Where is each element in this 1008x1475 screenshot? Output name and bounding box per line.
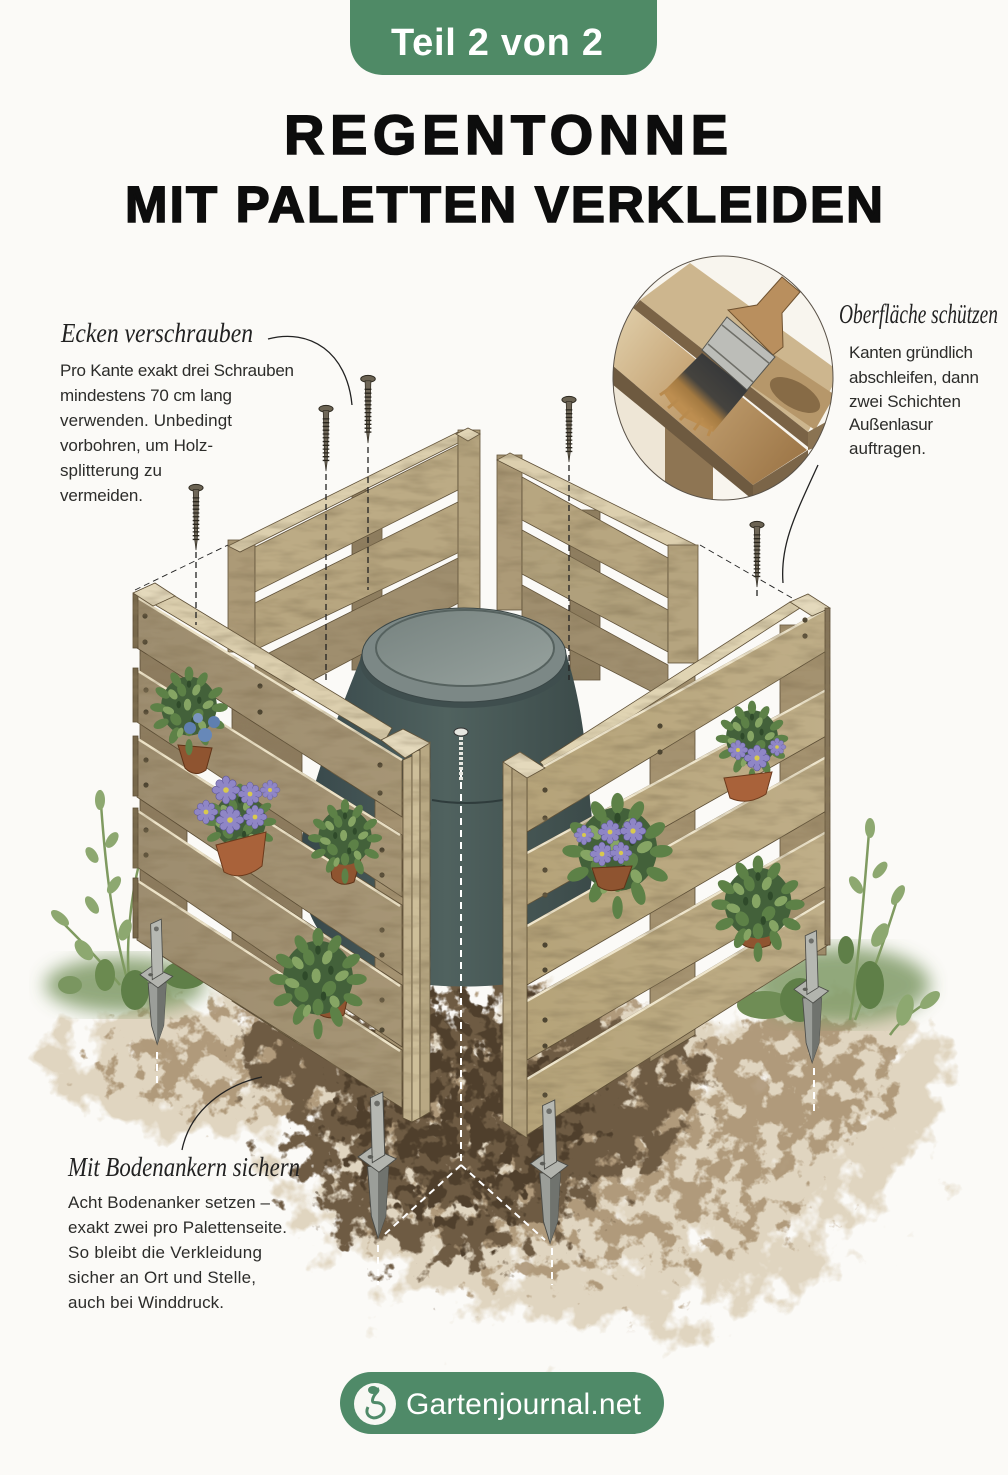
rain barrel [300, 608, 593, 986]
centre screw on barrel [454, 728, 468, 780]
screw 3 [361, 375, 375, 443]
callout text: Kanten gründlich [849, 343, 973, 362]
callout text [68, 1193, 287, 1312]
callout text [60, 361, 294, 505]
corner post [503, 758, 527, 1138]
barrel body [300, 660, 593, 986]
soil ground [0, 930, 990, 1385]
callout text: So bleibt die Verkleidung [68, 1243, 262, 1262]
arrow: surface protection [783, 465, 818, 583]
callout: corners screws [60, 318, 294, 505]
plank highlights [527, 608, 828, 1079]
screw 4 [562, 396, 576, 462]
hanging plant: green lower right [711, 855, 805, 962]
corner caps [503, 752, 545, 778]
planks [137, 598, 402, 1108]
hanging plant: purple flowers left [194, 776, 280, 876]
footer badge [340, 1372, 664, 1434]
callout text: auch bei Winddruck. [68, 1293, 224, 1312]
callout: ground anchors [67, 1152, 300, 1312]
pale outer soil [0, 955, 990, 1385]
screw 5 [750, 521, 764, 587]
callout heading: Mit Bodenankern sichern [67, 1152, 300, 1182]
white guide lines on soil [157, 770, 814, 1285]
hanging plant: purple flowers centre [562, 793, 673, 919]
pallet: back left [228, 428, 480, 712]
pallet: front right [503, 594, 830, 1138]
anchor front left [358, 1092, 396, 1238]
hanging plant: purple flowers upper right [715, 701, 789, 801]
plank highlights [138, 598, 402, 1051]
callout: surface protection [839, 299, 998, 458]
top rail [147, 584, 392, 742]
pallet: back right [497, 453, 698, 700]
deep soil shadow [280, 940, 640, 1280]
plank screws [142, 613, 385, 1033]
callout text: Pro Kante exakt drei Schrauben [60, 361, 294, 380]
dashed guide lines and screws [135, 375, 792, 680]
callout heading: Ecken verschrauben [60, 318, 253, 348]
logo icon [354, 1383, 396, 1425]
title: REGENTONNE [284, 103, 728, 166]
corner caps [381, 729, 430, 758]
hanging plant: green right of left pallet [308, 799, 382, 884]
pallet: front left [133, 583, 430, 1122]
callout text: auftragen. [849, 439, 926, 458]
plank screws [542, 617, 808, 1123]
anchor back right [794, 931, 829, 1063]
plank ends [133, 594, 138, 938]
screw 2 [319, 405, 333, 471]
corner post [403, 742, 430, 1122]
callout text: vorbohren, um Holz- [60, 436, 213, 455]
header badge: Teil 2 von 2 [391, 22, 603, 64]
planks [527, 607, 828, 1135]
callout text: splitterung zu [60, 461, 162, 480]
anchor front right [530, 1100, 568, 1243]
mid brown soil [50, 945, 930, 1335]
callout text: mindestens 70 cm lang [60, 386, 232, 405]
arrow: corner screws [268, 336, 352, 405]
right shrub [737, 818, 943, 1035]
hanging plant: blue flowers [150, 667, 228, 774]
callout text: Acht Bodenanker setzen – [68, 1193, 271, 1212]
arrow: ground anchors [182, 1077, 262, 1150]
support posts [650, 625, 826, 1062]
callout text: exakt zwei pro Palettenseite. [68, 1218, 287, 1237]
callout text: Außenlasur [849, 415, 933, 434]
hanging plant: green lower left pallet [269, 928, 367, 1039]
callout text: sicher an Ort und Stelle, [68, 1268, 256, 1287]
dark soil [205, 930, 750, 1320]
title [125, 103, 883, 233]
barrel lid [360, 608, 568, 708]
header badge [350, 0, 657, 75]
callout text: verwenden. Unbedingt [60, 411, 232, 430]
support posts [140, 650, 403, 1100]
paint brush [660, 277, 800, 436]
anchor back left [140, 919, 173, 1044]
callout text: zwei Schichten [849, 392, 961, 411]
top rail [540, 602, 800, 771]
title: MIT PALETTEN VERKLEIDEN [125, 176, 883, 233]
left shrub [45, 790, 207, 1013]
callout text: vermeiden. [60, 486, 143, 505]
callout text [849, 343, 979, 458]
callout text: abschleifen, dann [849, 368, 979, 387]
ground anchors [140, 919, 829, 1243]
background shrubs [45, 790, 943, 1035]
footer badge: Gartenjournal.net [406, 1388, 642, 1421]
detail circle: brush on wood [612, 256, 840, 510]
screw 1 [189, 484, 203, 550]
